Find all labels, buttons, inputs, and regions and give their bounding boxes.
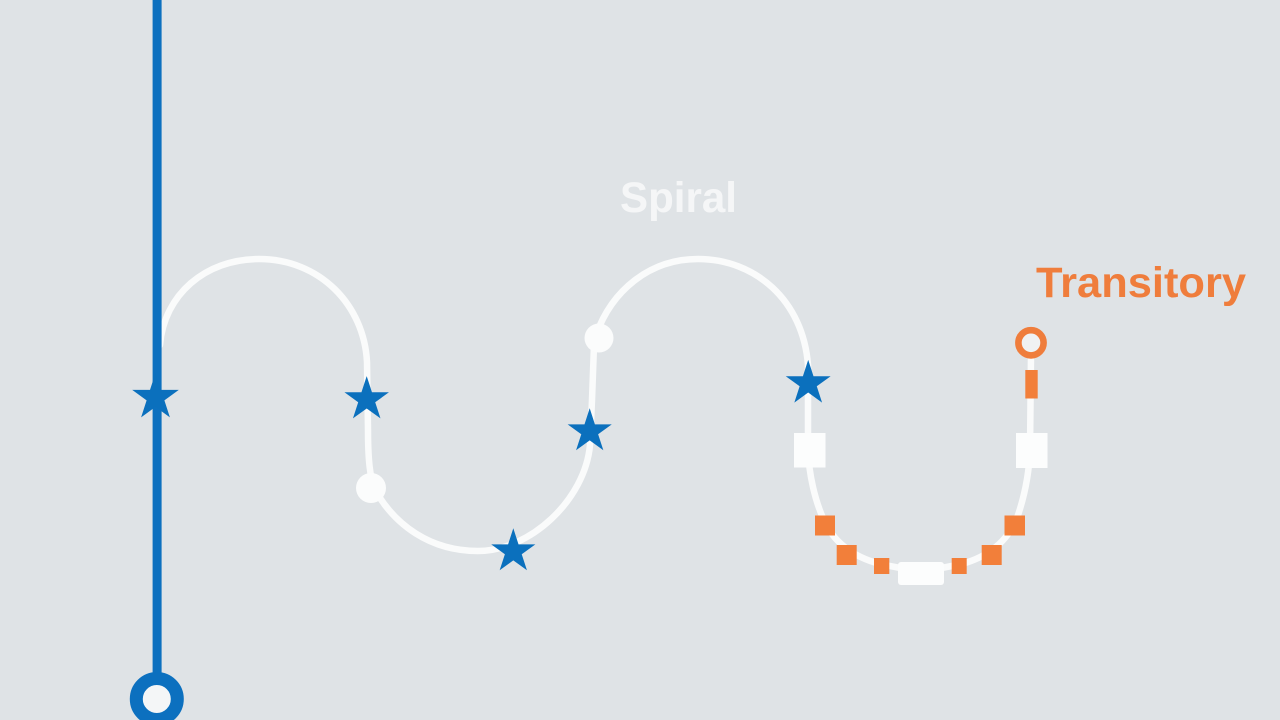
white circle marker lower	[356, 473, 386, 503]
end ring marker	[1018, 330, 1044, 355]
blue vertical line	[153, 0, 162, 682]
blue stars	[132, 360, 831, 570]
white circle marker upper	[584, 324, 614, 352]
white square markers	[794, 433, 1048, 585]
heading: Spiral: Spiral	[620, 174, 737, 222]
heading: Transitory: Transitory	[1036, 259, 1246, 307]
start ring marker	[136, 678, 177, 720]
white spiral path	[160, 259, 1031, 572]
orange square markers	[815, 370, 1038, 574]
